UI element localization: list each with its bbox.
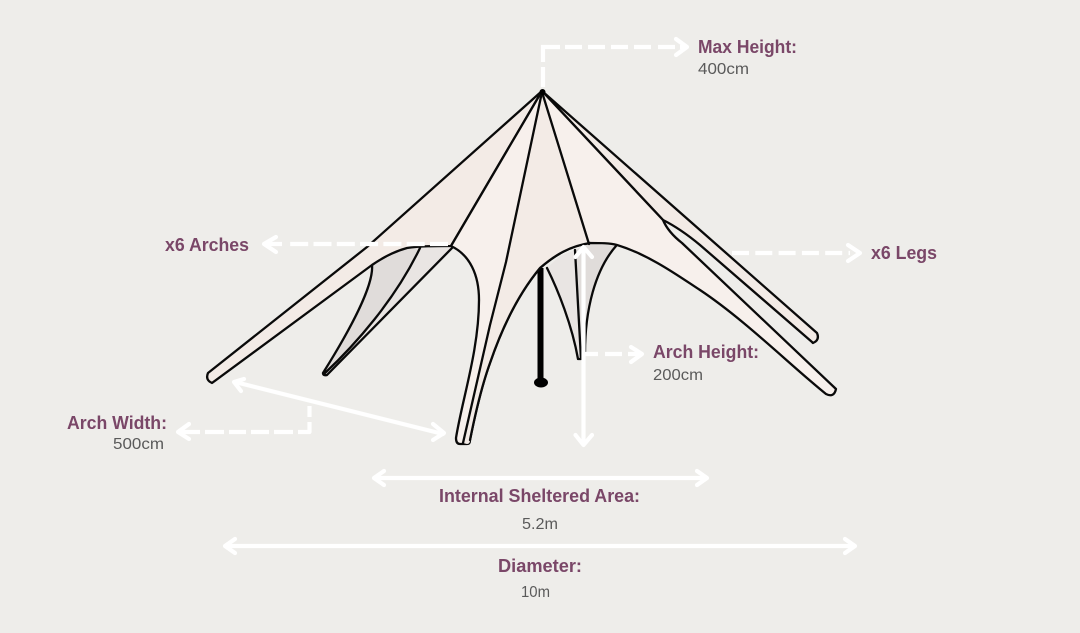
apex cap (540, 89, 546, 95)
left rear panel and leg (207, 91, 542, 383)
label: legs: x6 Legs (871, 243, 937, 263)
label: arch width: 500cm (113, 436, 164, 453)
icon: star tent (207, 89, 836, 444)
arrow: arches (264, 237, 448, 252)
arrow: arch height (576, 247, 642, 445)
label: diameter: 10m (521, 584, 550, 601)
label: internal sheltered area: Internal Sheltered Area: (439, 486, 640, 506)
label: internal sheltered area: 5.2m (522, 516, 558, 533)
arrow: max height (543, 39, 687, 87)
front canopy (451, 91, 836, 444)
label: diameter (498, 556, 582, 601)
canopy seams (463, 92, 590, 443)
label: max height (698, 37, 797, 78)
label: internal sheltered area (439, 486, 640, 533)
label: arch height: Arch Height: (653, 342, 759, 362)
right under-arch panels (547, 243, 616, 359)
arrow: diameter (225, 539, 855, 553)
label: arch width (67, 413, 167, 453)
label: arch width: Arch Width: (67, 413, 167, 433)
right rear leg (542, 91, 818, 343)
tent pole (534, 268, 548, 388)
label: arch height (653, 342, 759, 384)
centre canopy panel (463, 92, 589, 444)
left under-arch panels (323, 247, 453, 375)
label: diameter: Diameter: (498, 556, 582, 576)
label: arches: x6 Arches (165, 235, 249, 255)
arrow: legs (732, 245, 860, 261)
label: max height: Max Height: (698, 37, 797, 57)
arrow: internal sheltered area (374, 471, 707, 485)
label: max height: 400cm (698, 61, 749, 78)
arrow: arch width (178, 379, 444, 440)
label: arch height: 200cm (653, 367, 703, 384)
